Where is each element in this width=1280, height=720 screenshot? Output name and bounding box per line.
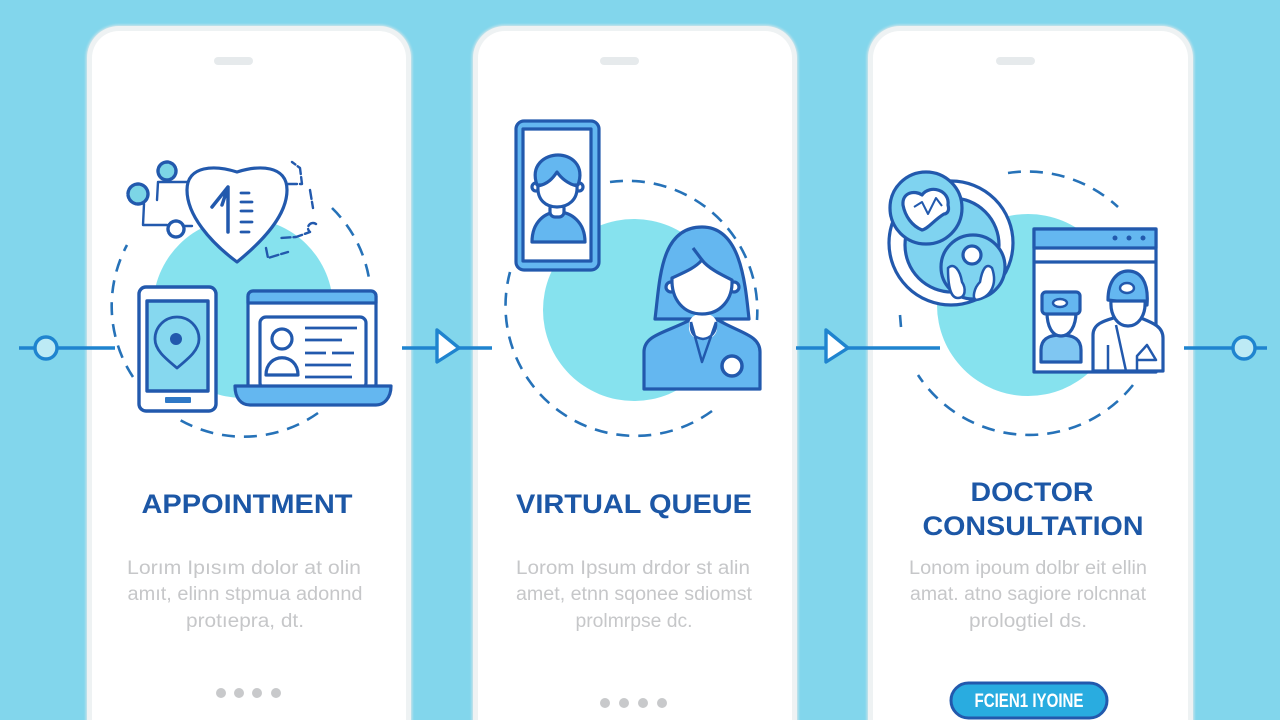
text block: doctor consultation body: Lonom ipoum dolbr eit ellin: [909, 558, 1147, 579]
text block: doctor consultation body: prologtiel ds.: [969, 611, 1087, 632]
icon: circles with heart and patient: [889, 172, 1013, 305]
text block: virtual queue body: prolmrpse dc.: [576, 611, 692, 632]
icon: smartphone with pin: [139, 287, 216, 411]
heading: doctor consultation: [922, 477, 1144, 541]
panel: virtual queue phone card: [472, 25, 798, 720]
connector: end node: [1184, 337, 1267, 359]
dashed orbit circle: [900, 172, 1133, 435]
connector: arrow to doctor consultation: [796, 330, 940, 362]
icon: heart with virus network: [128, 162, 316, 262]
text block: doctor consultation body: [909, 558, 1147, 632]
text block: appointment body: protıepra, dt.: [186, 611, 304, 632]
heading: doctor consultation: DOCTOR: [970, 477, 1094, 507]
phone speaker: [214, 57, 253, 65]
panel: appointment phone card: [86, 25, 412, 720]
text block: appointment body: [127, 558, 362, 632]
panel: doctor consultation phone card: [867, 25, 1194, 720]
dashed orbit circle: [506, 181, 757, 436]
button: pill: FCIEN1 IYOINE: [974, 691, 1084, 712]
icon: laptop with profile: [235, 291, 391, 405]
teal backdrop circle: [153, 218, 333, 398]
phone speaker: [600, 57, 639, 65]
dashed orbit circle: [112, 208, 370, 437]
text block: appointment body: amıt, elinn stpmua adonnd: [128, 584, 362, 605]
connector: start node: [19, 337, 115, 359]
text block: virtual queue body: amet, etnn sqonee sdiomst: [516, 584, 753, 605]
heading: virtual queue: VIRTUAL QUEUE: [516, 489, 752, 519]
text block: doctor consultation body: amat. atno sagiore rolcnnat: [910, 584, 1147, 605]
text block: virtual queue body: Lorom Ipsum drdor st alin: [516, 558, 750, 579]
button: pill: [951, 683, 1107, 718]
heading: doctor consultation: CONSULTATION: [922, 511, 1144, 541]
connector: arrow to virtual queue: [402, 330, 492, 362]
pagination dots: [600, 698, 667, 708]
phone speaker: [996, 57, 1035, 65]
teal backdrop circle: [543, 219, 725, 401]
pagination dots: [216, 688, 281, 698]
text block: virtual queue body: [516, 558, 753, 632]
teal backdrop circle: [937, 214, 1119, 396]
text block: appointment body: Lorım Ipısım dolor at olin: [127, 558, 361, 579]
icon: video call window with doctors: [1034, 229, 1163, 372]
icon: phone with caller: [516, 121, 599, 270]
heading: appointment: APPOINTMENT: [142, 489, 353, 519]
icon: woman doctor: [644, 227, 760, 389]
